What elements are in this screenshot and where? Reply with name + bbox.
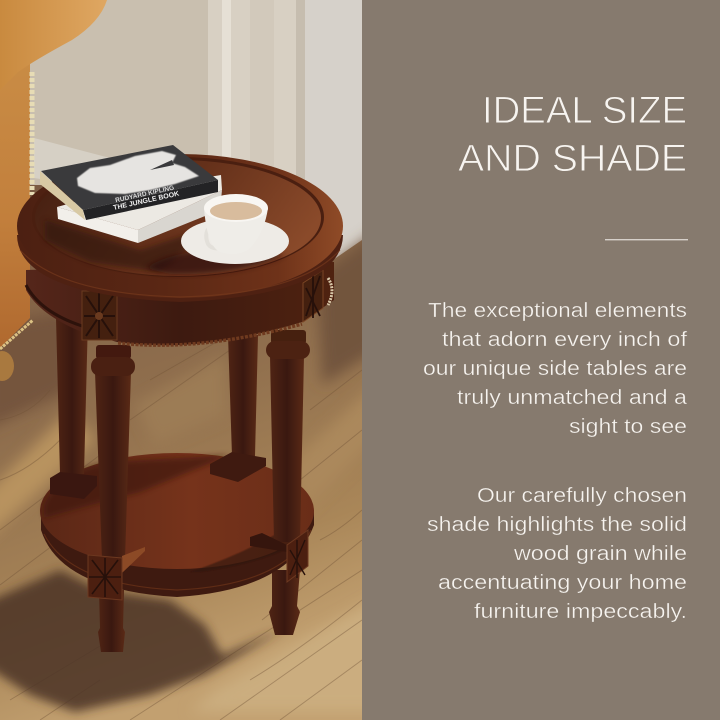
cup shadow: [145, 250, 285, 274]
book spine title: RUDYARD KIPLING: [115, 184, 175, 204]
black book: [40, 145, 218, 220]
front right leg: [250, 330, 310, 582]
carved block right: [303, 270, 323, 322]
paragraph: carefully chosen shade: wood grain while: [513, 542, 687, 565]
book cover art: [77, 151, 199, 194]
paragraph: carefully chosen shade: accentuating your home: [438, 571, 687, 594]
paragraph: exceptional elements: that adorn every inch of: [442, 328, 687, 351]
panel: product photo: [0, 0, 385, 720]
stacked books: [40, 145, 222, 243]
book shadow: [44, 221, 186, 273]
rim: [17, 235, 343, 302]
armchair: [0, 0, 107, 381]
paragraph: exceptional elements: truly unmatched and a: [457, 386, 688, 409]
heading: AND SHADE: [458, 138, 687, 180]
table surface: [35, 160, 321, 276]
paragraph: carefully chosen shade: shade highlights the solid: [427, 513, 687, 536]
heading: IDEAL SIZE: [482, 90, 687, 132]
carved block left: [82, 291, 117, 340]
paragraph: carefully chosen shade: [427, 484, 687, 623]
book spine title: THE JUNGLE BOOK: [113, 191, 180, 212]
divider line: [605, 239, 688, 240]
coffee: [210, 202, 262, 220]
paragraph: carefully chosen shade: furniture impeccably.: [474, 600, 687, 623]
cup body: [204, 208, 268, 254]
wall and curtain: [30, 0, 362, 259]
paragraph: carefully chosen shade: Our carefully chosen: [477, 484, 687, 507]
saucer: [181, 218, 289, 264]
teacup and saucer: [181, 194, 289, 264]
back legs: [50, 318, 266, 499]
paragraph: exceptional elements: [423, 299, 688, 438]
white book: [57, 175, 222, 243]
rope moulding: [118, 324, 302, 345]
heading: [458, 90, 687, 180]
paragraph: exceptional elements: The exceptional elements: [428, 299, 687, 322]
lower shelf: [40, 453, 314, 652]
paragraph: exceptional elements: sight to see: [569, 415, 687, 438]
cup handle: [204, 228, 217, 250]
apron: [26, 262, 334, 345]
wooden floor: [0, 185, 385, 720]
table top and apron: [17, 154, 343, 345]
panel: text background: [362, 0, 720, 720]
front legs: [88, 330, 310, 600]
paragraph: exceptional elements: our unique side tables are: [423, 357, 687, 380]
floor shadow: [0, 570, 285, 712]
front left leg: [88, 345, 145, 600]
